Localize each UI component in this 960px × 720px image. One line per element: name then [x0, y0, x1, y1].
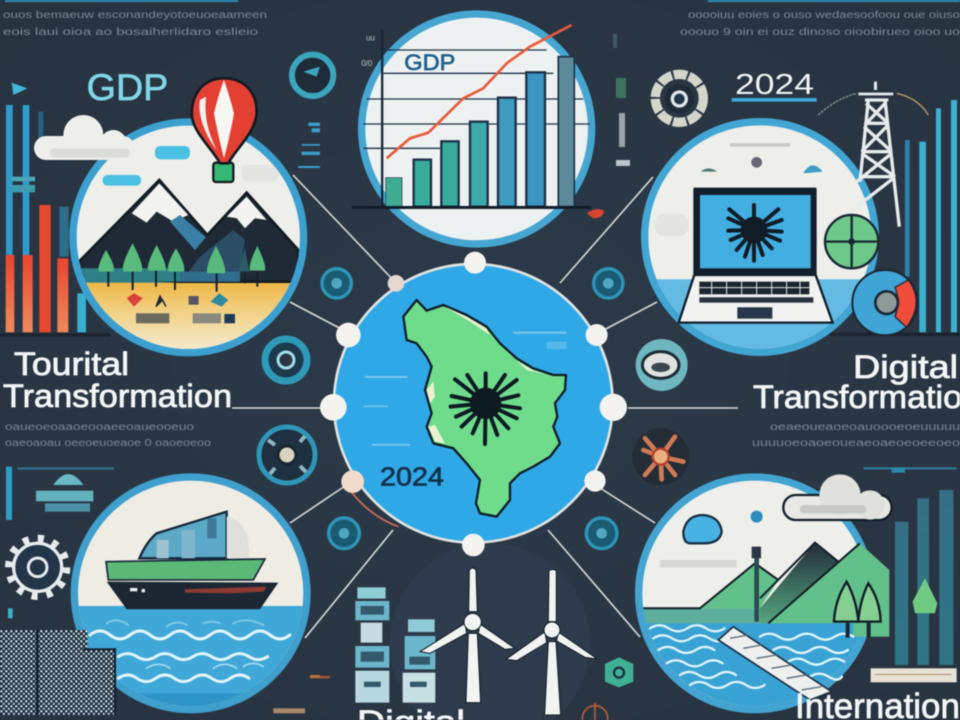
panel: tourism	[0, 55, 333, 358]
circle	[640, 122, 880, 353]
icon: gear	[9, 539, 66, 596]
icon: building stacks	[355, 587, 435, 703]
icon: trees	[834, 582, 881, 638]
icon: green globe	[825, 215, 878, 268]
icon: trees	[98, 243, 265, 292]
icon: gear	[655, 74, 703, 122]
heading: tourism transformation: Transformation	[3, 378, 232, 414]
circle: landscape	[67, 122, 313, 358]
nodes	[320, 252, 627, 556]
icon: teal ring left	[265, 339, 307, 381]
faint labels	[363, 332, 567, 446]
small marks right of top circle	[613, 34, 630, 166]
map shape	[403, 300, 566, 517]
gdp label: GDP	[87, 67, 168, 108]
icon: small badge	[636, 339, 688, 391]
chart: bar chart with trend	[352, 25, 604, 218]
heading: tourism transformation	[3, 346, 232, 414]
header text: top right	[680, 0, 960, 38]
panel: digital transformation	[640, 69, 960, 353]
heading: tourism transformation: Tourital	[14, 346, 129, 382]
icon: cloud	[783, 474, 892, 520]
orange mark	[320, 676, 330, 678]
icon: eagle on screen	[728, 205, 782, 261]
side bars: right of tourism	[298, 123, 320, 168]
text block: right description: uuuuoeoaoeoueaeoaeoeoeeoeo	[752, 438, 960, 449]
bars	[830, 100, 960, 336]
icon: orange compass	[582, 703, 608, 720]
icon: burst	[632, 428, 689, 485]
icon: laptop	[679, 188, 833, 323]
icon: green hexagon	[605, 657, 633, 687]
backdrop disc	[390, 543, 590, 720]
icon: waves	[650, 625, 853, 688]
icon: waves	[90, 620, 290, 682]
heading: digital transformation: Digital	[853, 349, 958, 385]
text block: left description	[5, 422, 212, 449]
header text: top left	[3, 0, 267, 38]
text block: right description: oeaeoueaoeoauoooeoeuuuuu	[770, 422, 960, 433]
dotted grid panel	[0, 630, 116, 715]
icon: eagle emblem	[451, 373, 520, 444]
icon: ship	[106, 512, 278, 609]
icon: teal ring top	[292, 55, 333, 96]
year label: 2024	[735, 69, 814, 101]
icon: cloud	[34, 115, 135, 160]
circle	[362, 14, 592, 244]
axis labels	[361, 34, 375, 68]
icon: wind turbines	[420, 568, 597, 715]
icon badges around map	[322, 269, 623, 549]
panel: top gdp chart	[352, 14, 604, 244]
central map	[320, 252, 627, 556]
icon: beach figures	[127, 293, 235, 323]
axis labels: 0/0	[361, 59, 373, 68]
red arc on ring	[343, 480, 398, 527]
icon: gauge	[852, 270, 918, 335]
left bar chart	[0, 83, 110, 337]
panel: international	[632, 339, 957, 715]
central disc	[334, 264, 613, 543]
icon: tower	[818, 82, 928, 227]
header text: top right: ooooiuu eoies o ouso wedaesoofoou oue oiuso	[688, 10, 960, 21]
orange marks	[273, 675, 320, 713]
panel: wind and renewable	[320, 543, 633, 720]
text block: left description: oaueoeoaaoeooaeeoaueooeuo	[5, 422, 195, 433]
header text: top left: eois laui oioa ao bosaiherlidaro eslieio	[3, 27, 259, 38]
circle	[67, 477, 317, 713]
icon: lighthouse post	[683, 511, 763, 622]
map year: 2024	[380, 462, 444, 492]
icon: hot air balloon	[192, 78, 257, 182]
axis labels: uu	[366, 34, 375, 43]
coast highlights	[427, 307, 547, 443]
chart title: GDP	[404, 50, 455, 75]
connector lines	[232, 175, 738, 638]
circle	[639, 477, 889, 715]
text block: left description: oaeoaoau oeeoeuoeaoe 0 oaoeoeoo	[5, 438, 212, 449]
icon: ship badge	[6, 467, 114, 618]
header text: top right: ooouo 9 oin ei ouz dinoso oioobirueo oioo uo	[680, 27, 960, 38]
icon: pier	[718, 627, 832, 700]
icon: gear badge left	[259, 427, 315, 483]
header text: top left: ouos bemaeuw esconandeyotoeuoeaameen	[3, 10, 267, 21]
heading: digital transformation	[753, 349, 960, 415]
panel: shipping	[0, 467, 320, 715]
text block: right description	[752, 422, 960, 449]
city skyline	[863, 467, 957, 682]
